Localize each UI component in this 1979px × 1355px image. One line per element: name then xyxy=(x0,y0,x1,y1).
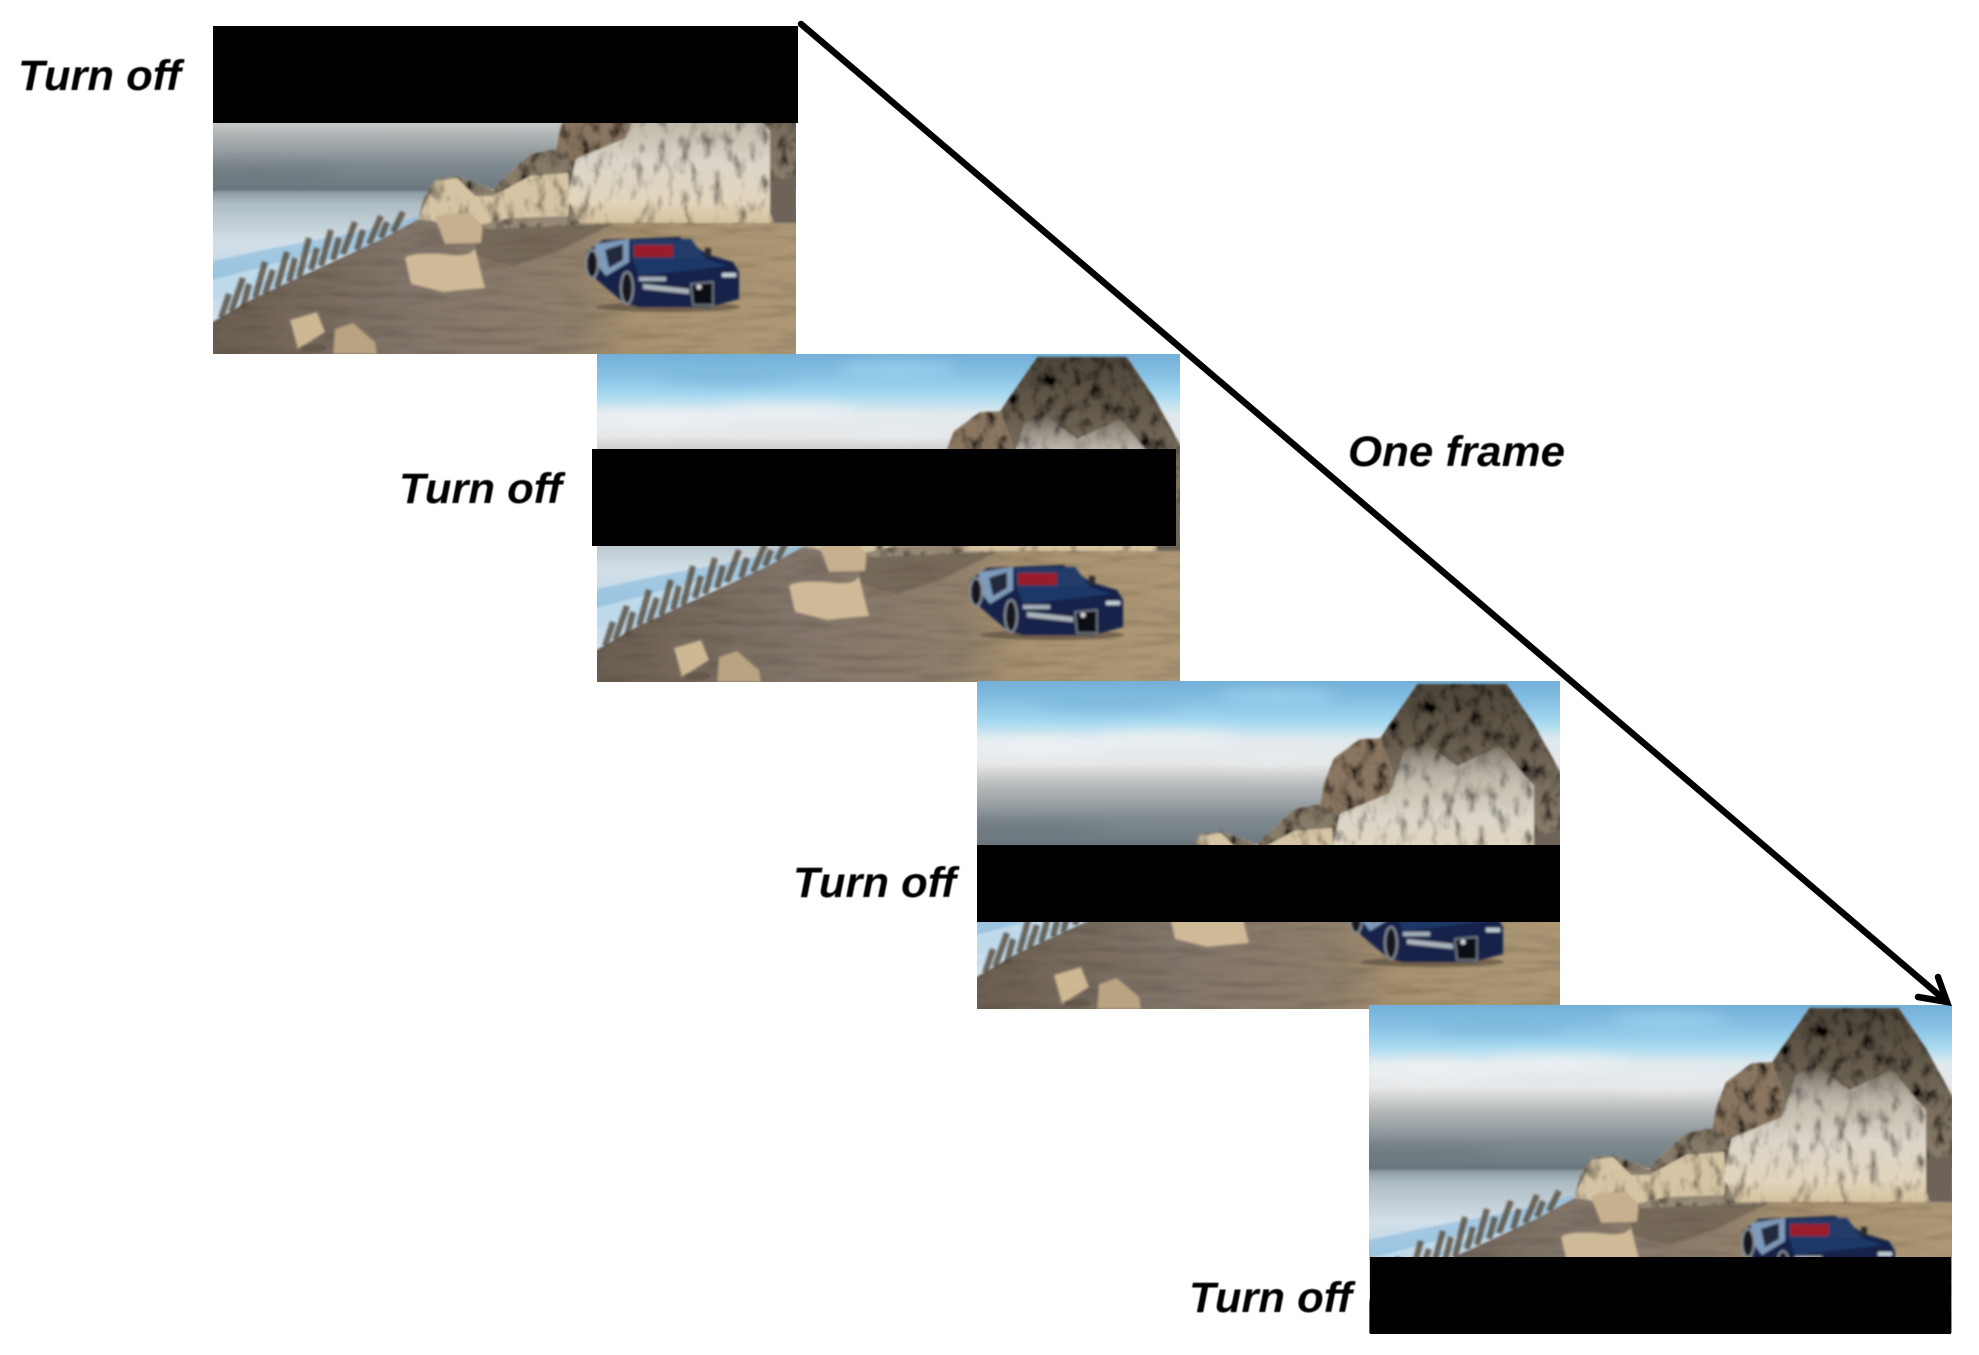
frame 2: photo with second bar turned off xyxy=(547,349,1187,689)
frame 4: photo with bottom bar turned off xyxy=(1319,1000,1959,1340)
frame 2 photo xyxy=(547,349,1187,689)
frame 1: photo with top bar turned off xyxy=(163,21,803,361)
label: One frame: One frame xyxy=(1348,428,1565,476)
frame 4 photo xyxy=(1319,1000,1959,1340)
frame 4 black bar xyxy=(1370,1257,1951,1334)
arrow: one frame duration xyxy=(801,24,1947,1002)
label: Turn off, frame 3: Turn off xyxy=(793,859,960,907)
frame 3 photo xyxy=(927,676,1567,1016)
label: Turn off, frame 1: Turn off xyxy=(18,52,185,100)
label: Turn off, frame 4: Turn off xyxy=(1189,1274,1356,1322)
frame 1 photo xyxy=(163,21,803,361)
frame 3 black bar xyxy=(977,845,1560,922)
frame 2 black bar xyxy=(592,449,1176,546)
frame 3: photo with third bar turned off xyxy=(927,676,1567,1016)
frame 1 black bar xyxy=(213,26,798,123)
label: Turn off, frame 2: Turn off xyxy=(399,465,566,513)
